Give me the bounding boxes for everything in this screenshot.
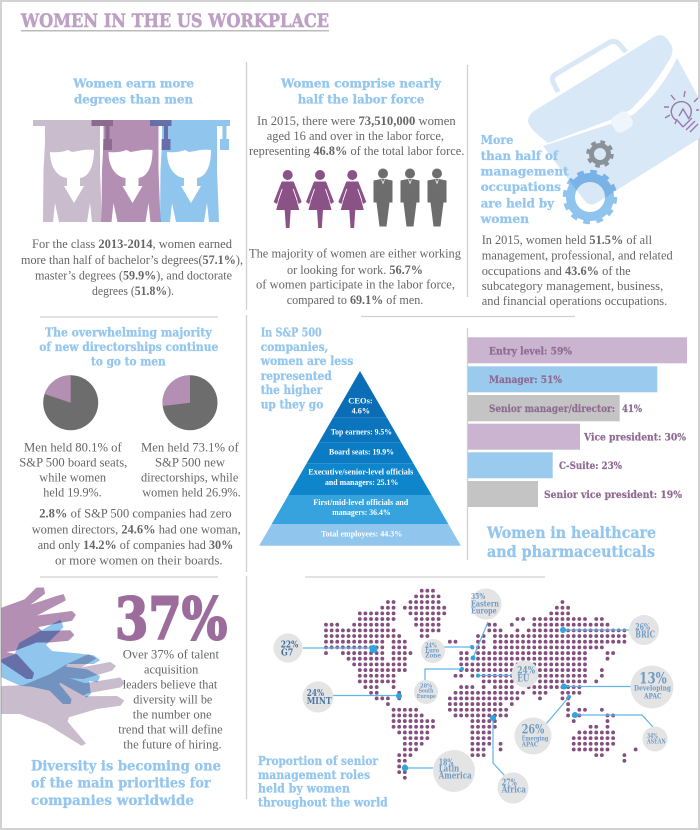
heading: pyramid: companies, bbox=[261, 340, 328, 354]
callout: MINT bbox=[302, 682, 334, 712]
heading: management: are held by bbox=[481, 196, 555, 210]
text: board seats bbox=[19, 440, 127, 500]
heading: world map bbox=[258, 754, 388, 810]
callout: G7 bbox=[274, 634, 302, 662]
heading: directorships bbox=[39, 326, 219, 369]
heading: management: than half of bbox=[481, 149, 559, 163]
heading: labor force: Women comprise nearly bbox=[280, 76, 442, 90]
chart: pyramid: CEOs: bbox=[348, 396, 373, 405]
text: management: and financial operations occupations. bbox=[482, 293, 667, 308]
heading: world map: throughout the world bbox=[258, 796, 388, 810]
icon: grey gear bbox=[588, 142, 612, 166]
callout: Emerging APAC: APAC bbox=[521, 742, 538, 749]
heading: healthcare bbox=[486, 523, 656, 561]
panel: directorships bbox=[19, 326, 241, 567]
panel: management bbox=[480, 35, 700, 308]
text: boards summary: and only 14.2% of companies had 30% bbox=[38, 537, 233, 552]
callout: Developing APAC bbox=[630, 666, 674, 708]
heading: directorships: The overwhelming majority bbox=[45, 326, 213, 340]
callout: Euro Zone: Zone bbox=[425, 653, 441, 660]
heading: labor force bbox=[280, 76, 442, 106]
panel: healthcare bbox=[468, 337, 687, 561]
heading: pyramid: up they go bbox=[261, 397, 323, 411]
callout: BRIC: BRIC bbox=[635, 631, 655, 641]
text: degrees: master’s degrees (59.9%), and doctorate bbox=[35, 268, 232, 282]
text: labor force intro bbox=[249, 113, 464, 158]
text: board seats: while women bbox=[39, 470, 106, 485]
map: dotted world bbox=[326, 591, 636, 778]
text: degrees: degrees (51.8%). bbox=[92, 283, 174, 298]
heading: management: occupations bbox=[481, 180, 561, 194]
callout: Africa: Africa bbox=[501, 785, 526, 795]
heading: labor force: half the labor force bbox=[298, 92, 425, 106]
callout: ASEAN: 34% bbox=[647, 733, 658, 740]
heading: diversity bbox=[31, 759, 221, 809]
heading: management: women bbox=[480, 212, 529, 226]
text: management: management, professional, and related bbox=[482, 247, 673, 262]
text: talent leaders: the number one bbox=[133, 706, 212, 721]
panel: diversity bbox=[2, 585, 227, 809]
heading: diversity: companies worldwide bbox=[31, 793, 194, 809]
heading: pyramid bbox=[260, 326, 354, 411]
callout: Developing APAC: 13% bbox=[639, 668, 667, 687]
heading: degrees bbox=[72, 76, 194, 106]
callout: Emerging APAC: Emerging bbox=[522, 736, 549, 743]
text: talent leaders: leaders believe that bbox=[123, 676, 218, 691]
text: talent leaders: Over 37% of talent bbox=[123, 646, 219, 661]
callout: Euro Zone bbox=[421, 639, 445, 663]
callout: South Europe: 28% bbox=[420, 683, 433, 689]
heading: management bbox=[480, 133, 569, 226]
icon: briefcase bbox=[528, 35, 700, 205]
text: board seats: Men held 80.1% of bbox=[24, 440, 122, 455]
text: new directorships: Men held 73.1% of bbox=[141, 440, 239, 455]
chart: pyramid: 4.6% bbox=[352, 406, 370, 415]
callout: Latin America: America bbox=[438, 771, 472, 781]
callout: Developing APAC: APAC bbox=[643, 692, 662, 701]
callout: Latin America bbox=[433, 750, 475, 792]
heading: pyramid: represented bbox=[261, 369, 332, 383]
heading: healthcare: Women in healthcare bbox=[486, 523, 656, 542]
text: degrees bbox=[21, 236, 243, 298]
text: labor force participation: of women participate in the labor force, bbox=[256, 277, 455, 292]
text: labor force intro: In 2015, there were 73,510,000 women bbox=[257, 113, 456, 128]
callout: EU: 24% bbox=[517, 665, 535, 676]
pie chart: new directorships bbox=[162, 375, 218, 430]
bar chart: healthcare: 41% bbox=[622, 403, 642, 415]
callout: Africa bbox=[498, 772, 528, 804]
callout: BRIC bbox=[629, 615, 659, 645]
title: WOMEN IN THE US WORKPLACE bbox=[20, 10, 329, 32]
pie chart: board seats bbox=[43, 375, 98, 430]
text: board seats: held 19.9%. bbox=[43, 485, 102, 500]
heading: pyramid: women are less bbox=[260, 354, 354, 368]
text: new directorships: women held 26.9%. bbox=[142, 485, 241, 500]
stat: 37%: 37% bbox=[115, 585, 227, 653]
icon: three graduates bbox=[33, 120, 230, 222]
panel: S&P pyramid bbox=[259, 326, 461, 546]
heading: directorships: to go to men bbox=[91, 355, 166, 369]
text: talent leaders bbox=[118, 646, 223, 751]
callout: Latin America: Latin bbox=[439, 765, 460, 775]
chart: pyramid: Total employees: 44.3% bbox=[321, 529, 402, 538]
text: new directorships: directorships, while bbox=[141, 470, 239, 485]
text: talent leaders: trend that will define bbox=[118, 721, 223, 736]
connector lines and markers bbox=[303, 622, 653, 776]
icon: three men bbox=[374, 168, 446, 226]
callout: Euro Zone: 24% bbox=[425, 643, 437, 650]
callout: MINT: 24% bbox=[307, 689, 324, 699]
icon: light bulb bbox=[664, 91, 699, 132]
chart: pyramid: Top earners: 9.5% bbox=[331, 427, 392, 436]
text: new directorships: S&P 500 new bbox=[155, 455, 226, 470]
text: labor force participation: or looking for work. 56.7% bbox=[287, 262, 423, 277]
chart: pyramid: and managers: 25.1% bbox=[325, 478, 398, 487]
heading: diversity: of the main priorities for bbox=[31, 775, 211, 791]
text: degrees: more than half of bachelor’s degrees(57.1%), bbox=[21, 252, 243, 267]
callout: Eastern Europe bbox=[470, 588, 502, 620]
callout: EU bbox=[512, 660, 538, 688]
callout: South Europe: Europe bbox=[417, 694, 436, 700]
callout: MINT: MINT bbox=[307, 697, 332, 707]
text: labor force participation: The majority of women are either working bbox=[249, 245, 461, 260]
text: labor force participation: compared to 69.1% of men. bbox=[287, 292, 423, 307]
callout: BRIC: 26% bbox=[635, 623, 650, 633]
heading: management: More bbox=[481, 133, 514, 147]
heading: diversity: Diversity is becoming one bbox=[31, 759, 221, 775]
callout: South Europe bbox=[414, 680, 438, 704]
chart: pyramid: Board seats: 19.9% bbox=[329, 447, 394, 456]
callout: G7: 22% bbox=[281, 641, 299, 651]
callout: South Europe: South bbox=[419, 688, 433, 694]
text: new directorships bbox=[141, 440, 241, 500]
chart: pyramid bbox=[259, 371, 461, 546]
icon: blue gear bbox=[566, 172, 614, 222]
chart: pyramid: Executive/senior-level officials bbox=[308, 467, 413, 476]
heading: pyramid: the higher bbox=[261, 383, 323, 397]
text: management: In 2015, women held 51.5% of all bbox=[482, 232, 652, 247]
text: board seats: S&P 500 board seats, bbox=[19, 455, 127, 470]
text: boards summary: 2.8% of S&P 500 companies had zero bbox=[39, 506, 232, 521]
callout: Latin America: 18% bbox=[439, 758, 454, 768]
callout: Emerging APAC: 26% bbox=[522, 722, 545, 737]
text: boards summary bbox=[32, 506, 241, 567]
callout: Developing APAC: Developing bbox=[634, 684, 671, 693]
heading: directorships: of new directorships continue bbox=[39, 340, 219, 354]
text: management: occupations and 43.6% of the bbox=[482, 263, 631, 278]
text: management: subcategory management, business, bbox=[482, 278, 663, 293]
bar chart: healthcare: Manager: 51% bbox=[489, 374, 562, 386]
callout: Eastern Europe: 35% bbox=[471, 591, 485, 601]
callout: EU: EU bbox=[517, 674, 530, 685]
bar chart: healthcare: Vice president: 30% bbox=[583, 432, 686, 444]
heading: healthcare: and pharmaceuticals bbox=[487, 542, 655, 561]
bar chart: healthcare bbox=[468, 337, 687, 507]
callout: Eastern Europe: Eastern bbox=[471, 599, 499, 609]
text: labor force participation bbox=[249, 245, 461, 307]
heading: pyramid: In S&P 500 bbox=[261, 326, 322, 340]
heading: world map: held by women bbox=[258, 782, 350, 796]
callout: ASEAN bbox=[642, 726, 668, 752]
heading: management: management bbox=[481, 165, 569, 179]
icon: hands bbox=[2, 588, 124, 745]
text: labor force intro: aged 16 and over in the labor force, bbox=[267, 128, 444, 143]
callout: Emerging APAC bbox=[514, 718, 552, 754]
heading: degrees: Women earn more bbox=[72, 76, 194, 90]
heading: degrees: degrees than men bbox=[74, 92, 193, 106]
bar chart: healthcare: C-Suite: 23% bbox=[559, 460, 622, 472]
heading: world map: management roles bbox=[258, 768, 370, 782]
text: talent leaders: diversity will be bbox=[133, 691, 213, 706]
heading: world map: Proportion of senior bbox=[258, 754, 379, 768]
text: management bbox=[482, 232, 673, 308]
callout: Eastern Europe: Europe bbox=[471, 605, 497, 615]
bar chart: healthcare: Senior manager/director: bbox=[489, 403, 615, 415]
chart: pyramid: First/mid-level officials and bbox=[313, 498, 409, 507]
text: boards summary: women directors, 24.6% had one woman, bbox=[32, 521, 241, 536]
bar chart: healthcare: Entry level: 59% bbox=[489, 346, 572, 358]
text: degrees: For the class 2013-2014, women earned bbox=[32, 236, 232, 251]
panel: labor force bbox=[249, 76, 464, 307]
icon: three women bbox=[274, 170, 366, 228]
callout: G7: G7 bbox=[281, 649, 293, 659]
callout: ASEAN: ASEAN bbox=[646, 738, 666, 745]
chart: pyramid: managers: 36.4% bbox=[332, 508, 391, 517]
text: labor force intro: representing 46.8% of the total labor force. bbox=[249, 143, 464, 158]
text: talent leaders: acquisition bbox=[144, 661, 199, 676]
bar chart: healthcare: Senior vice president: 19% bbox=[544, 489, 682, 501]
panel: degrees bbox=[21, 76, 243, 298]
text: boards summary: or more women on their boards. bbox=[55, 552, 223, 567]
callout: Africa: 27% bbox=[502, 779, 517, 789]
panel: world map bbox=[258, 588, 674, 810]
text: talent leaders: the future of hiring. bbox=[123, 736, 222, 751]
callout: Euro Zone: Euro bbox=[425, 648, 439, 655]
